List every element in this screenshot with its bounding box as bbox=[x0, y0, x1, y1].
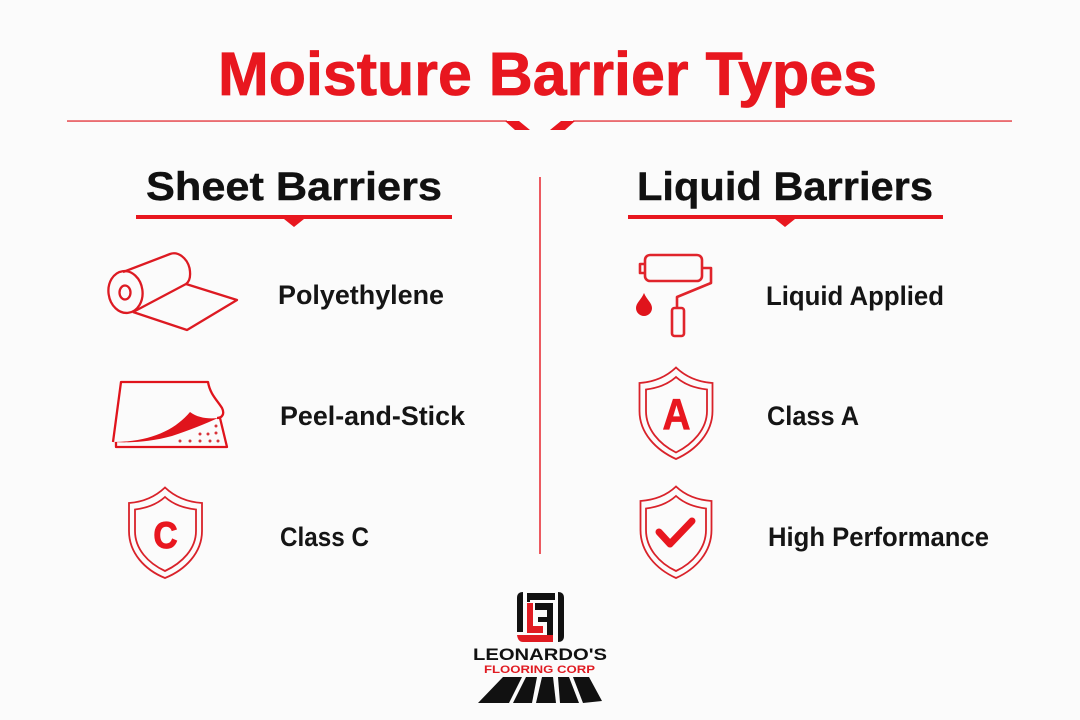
icon: peel-and-stick sheet bbox=[113, 382, 227, 447]
icon: class A shield: A bbox=[662, 390, 690, 439]
icon: paint roller with drop bbox=[636, 255, 711, 336]
label: class C: Class C bbox=[280, 522, 369, 552]
logo subtitle: FLOORING CORP bbox=[484, 664, 595, 676]
title: Moisture Barrier Types bbox=[218, 40, 877, 108]
title rule with chevrons bbox=[67, 120, 1012, 130]
icon: class A shield bbox=[640, 368, 712, 459]
icon: polyethylene roll bbox=[106, 253, 237, 330]
icon: high performance shield with check bbox=[640, 486, 712, 578]
logo mark bbox=[517, 592, 564, 642]
label: liquid applied: Liquid Applied bbox=[766, 281, 944, 311]
logo floor planks bbox=[478, 677, 602, 703]
panel: sheet barriers bbox=[106, 165, 466, 578]
label: polyethylene: Polyethylene bbox=[278, 280, 444, 310]
icon: class C shield bbox=[129, 488, 202, 578]
label: class A: Class A bbox=[767, 401, 859, 431]
heading: sheet barriers: Sheet Barriers bbox=[146, 165, 442, 209]
label: peel-and-stick: Peel-and-Stick bbox=[280, 401, 466, 431]
icon: class C shield: C bbox=[154, 515, 178, 556]
label: high performance: High Performance bbox=[768, 522, 989, 552]
panel: liquid barriers bbox=[628, 165, 989, 578]
heading: liquid barriers bbox=[628, 165, 943, 227]
logo: Leonardo's Flooring Corp bbox=[473, 592, 607, 703]
heading: sheet barriers bbox=[136, 165, 452, 227]
heading: liquid barriers: Liquid Barriers bbox=[637, 165, 933, 209]
logo name: LEONARDO'S bbox=[473, 645, 607, 664]
